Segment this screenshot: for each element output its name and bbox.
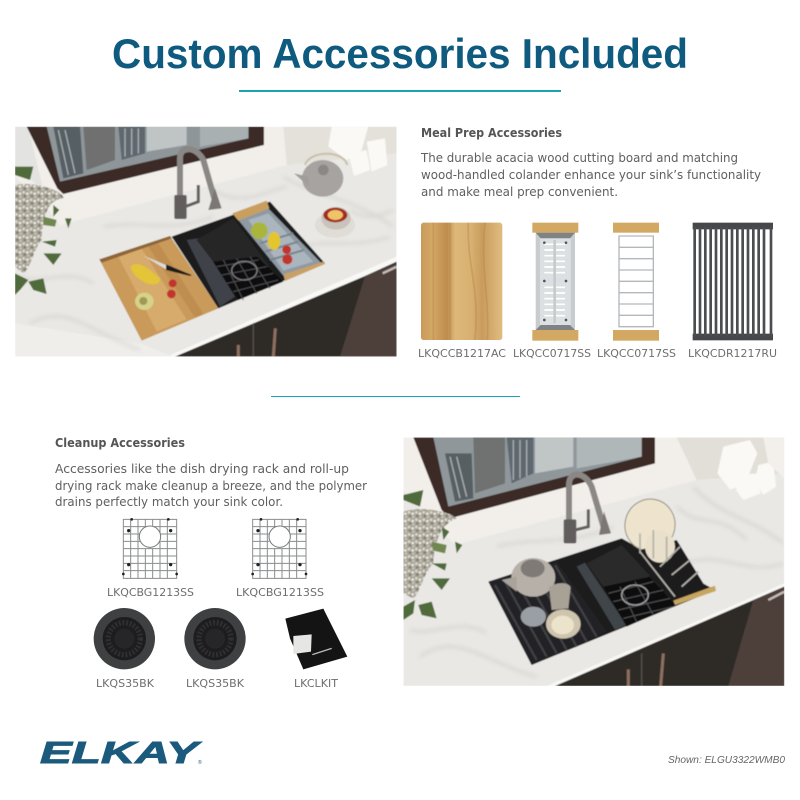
cabinets (555, 587, 784, 686)
sink basin (488, 538, 715, 665)
label: LKQCC0717SS rack: LKQCC0717SS (597, 347, 676, 360)
window glass (47, 127, 248, 182)
heading: cleanup: Cleanup Accessories (55, 436, 185, 450)
section divider (271, 396, 520, 397)
kettle (302, 160, 343, 197)
cutting board (99, 236, 218, 341)
meal prep products (418, 223, 777, 360)
product: drain 2 (184, 608, 246, 669)
colander (238, 208, 322, 276)
text block: meal prep description: and make meal prep convenient. (421, 184, 618, 199)
window frame (27, 127, 264, 194)
label: LKQCDR1217RU: LKQCDR1217RU (688, 347, 777, 360)
window glass (433, 437, 642, 507)
product: colander (532, 223, 578, 341)
logo: Elkay: ® (198, 759, 202, 766)
faucet (569, 475, 605, 532)
product: cleaning kit (285, 609, 347, 669)
text block: cleanup description: drying rack make cleanup a breeze, and the polymer (55, 478, 368, 493)
product: dish rack (613, 223, 659, 341)
label: LKQCBG1213SS 1: LKQCBG1213SS (107, 586, 194, 599)
text block: cleanup description: Accessories like the dish drying rack and roll-up (55, 461, 349, 476)
heading: meal prep: Meal Prep Accessories (421, 126, 562, 140)
label: LKQCBG1213SS 2: LKQCBG1213SS (236, 586, 324, 599)
text block: meal prep description: The durable acacia wood cutting board and matching (420, 150, 738, 165)
window frame (413, 437, 655, 518)
title underline (239, 90, 561, 92)
label: LKQCC0717SS colander: LKQCC0717SS (513, 347, 591, 360)
text block: cleanup description (55, 461, 368, 509)
faucet (180, 149, 217, 207)
product: bottom grid 2 (251, 518, 307, 578)
roll-up rack (488, 562, 607, 665)
dish rack with plates (619, 493, 716, 605)
logo: Elkay: ELKAY (40, 735, 203, 770)
cabinets (175, 262, 397, 357)
flowers (403, 509, 457, 598)
label: LKCLKIT: LKCLKIT (294, 677, 338, 690)
teapot (511, 558, 555, 597)
cups and strainer (549, 583, 571, 610)
canisters (717, 440, 757, 489)
text block: meal prep description (420, 150, 762, 199)
photo: meal prep sink (15, 127, 397, 357)
sink basin (172, 202, 325, 308)
product: drain 1 (94, 608, 155, 669)
caption: shown model: Shown: ELGU3322WMB0 (668, 754, 785, 766)
photo: cleanup sink (403, 437, 784, 686)
cleanup products (94, 518, 347, 690)
canisters (328, 127, 368, 160)
product: bottom grid 1 (122, 518, 178, 578)
title: Custom Accessories Included (112, 30, 688, 77)
label: LKQS35BK 2: LKQS35BK (186, 677, 245, 690)
tea cup (315, 216, 355, 238)
label: LKQCCB1217AC: LKQCCB1217AC (418, 347, 506, 360)
flowers (15, 184, 64, 273)
text block: cleanup description: drains perfectly match your sink color. (55, 494, 283, 509)
text block: meal prep description: wood-handled colander enhance your sink’s functionality (421, 167, 762, 182)
logo: Elkay (40, 735, 203, 770)
product: cutting board (421, 223, 502, 340)
product: roll-up drying rack (693, 223, 773, 340)
label: LKQS35BK 1: LKQS35BK (96, 677, 155, 690)
